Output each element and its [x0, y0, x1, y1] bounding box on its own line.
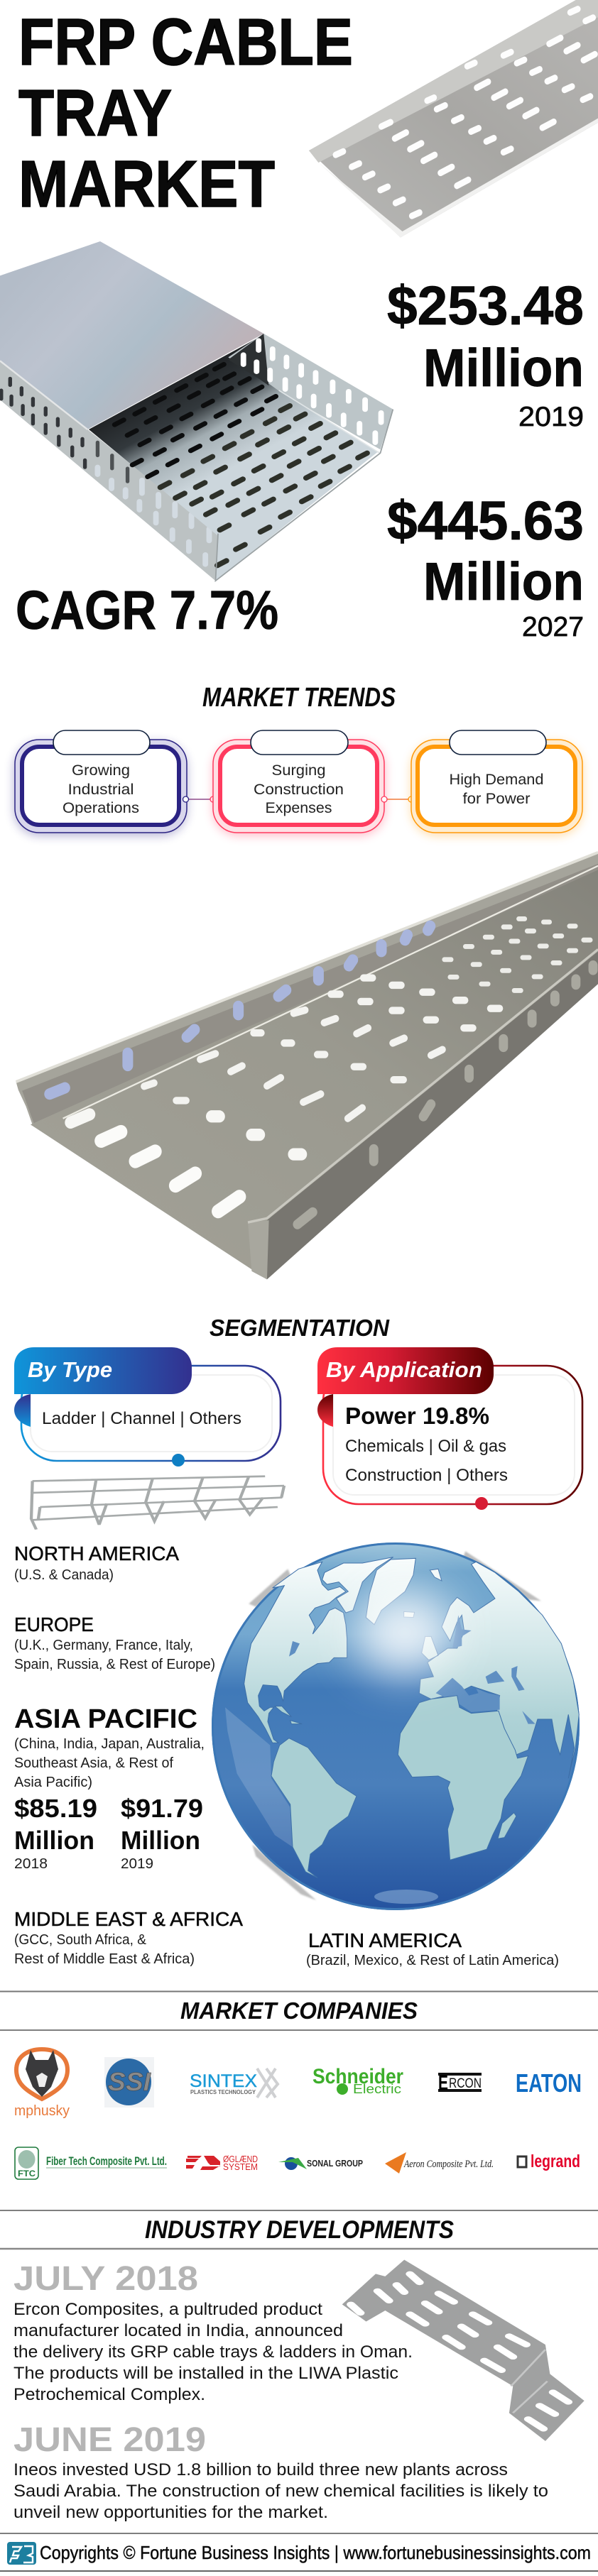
- development: july 2018: Ercon Composites, a pultruded product: [13, 2300, 322, 2319]
- development: july 2018: [13, 2260, 413, 2404]
- heading: segmentation: SEGMENTATION: [210, 1315, 390, 1341]
- logo: Schneider Electric: Schneider: [312, 2065, 403, 2088]
- development: july 2018: manufacturer located in India, announced: [13, 2321, 343, 2340]
- logo: Sonal Group: SONAL GROUP: [307, 2158, 363, 2169]
- CAGR callout: CAGR 7.7%: [16, 580, 278, 641]
- logo: Sintex: SINTEX: [190, 2071, 257, 2091]
- development: june 2019: unveil new opportunities for the market.: [13, 2503, 328, 2522]
- image: perforated tray in perspective: [16, 853, 598, 1279]
- image: metal bracket: [342, 2259, 585, 2441]
- trend cards: [14, 730, 582, 835]
- stat: asia pacific 2018: [14, 1794, 97, 1872]
- region: middle east and africa: (GCC, South Africa, &: [14, 1932, 147, 1948]
- card: high demand for power: for Power: [463, 791, 530, 807]
- stat: asia pacific 2019: 2019: [121, 1856, 153, 1872]
- logo: Legrand: [518, 2152, 580, 2171]
- logo: Fiber Tech Composite: Fiber Tech Composite Pvt. Ltd.: [46, 2154, 167, 2168]
- development: july 2018: JULY 2018: [13, 2260, 198, 2298]
- stat: 2027 market size: $445.63: [387, 490, 584, 552]
- development: july 2018: the delivery its GRP cable trays & ladders in Oman.: [13, 2342, 413, 2362]
- region: north america: (U.S. & Canada): [14, 1567, 114, 1583]
- development: june 2019: Saudi Arabia. The construction of new chemical facilities is likely to: [13, 2482, 548, 2501]
- card: surging construction expenses: Construction: [254, 782, 344, 798]
- region: europe: Spain, Russia, & Rest of Europe): [14, 1657, 215, 1672]
- stat: asia pacific 2019: [121, 1794, 203, 1872]
- region: north america: NORTH AMERICA: [14, 1542, 180, 1564]
- card: high demand for power: [411, 730, 582, 835]
- logo: Aeron Composite: [385, 2152, 494, 2174]
- region: europe: [14, 1613, 215, 1672]
- logo: Fiber Tech Composite: [15, 2147, 167, 2179]
- region: europe: EUROPE: [14, 1613, 94, 1635]
- stat: asia pacific 2019: Million: [121, 1826, 200, 1855]
- panel: by type: [14, 1347, 281, 1467]
- stat: 2019 market size: [387, 275, 584, 432]
- logo: Aeron Composite: Aeron Composite Pvt. Ltd.: [403, 2159, 494, 2170]
- application list: Construction | Others: [345, 1466, 508, 1485]
- type list: Ladder | Channel | Others: [42, 1409, 241, 1428]
- logo: Fiber Tech Composite: FTC: [18, 2169, 36, 2178]
- logo: Schneider Electric: Electric: [353, 2082, 401, 2096]
- region: middle east and africa: [14, 1908, 244, 1967]
- logo: Sintex: PLASTICS TECHNOLOGY: [190, 2089, 256, 2095]
- stat: 2019 market size: 2019: [518, 402, 584, 432]
- stat: 2019 market size: Million: [423, 338, 584, 398]
- application list: Power 19.8%: [345, 1403, 489, 1429]
- region: north america: [14, 1542, 180, 1583]
- logo: Oglaend System: ØGLÆND: [223, 2154, 258, 2164]
- stat: 2027 market size: Million: [423, 552, 584, 611]
- image: flat perforated cable tray: [309, 0, 598, 238]
- header: by application: [317, 1347, 494, 1394]
- header: by application: By Application: [326, 1357, 482, 1382]
- logo: Sonal Group: [278, 2157, 363, 2170]
- stat: 2027 market size: [387, 490, 584, 642]
- development: july 2018: Petrochemical Complex.: [13, 2385, 205, 2404]
- region: latin america: [306, 1929, 559, 1968]
- heading: industry developments: INDUSTRY DEVELOPMENTS: [145, 2216, 454, 2244]
- logo: Oglaend System: [186, 2154, 258, 2172]
- region: asia pacific: Southeast Asia, & Rest of: [14, 1755, 173, 1771]
- image: wire mesh tray: [31, 1476, 284, 1530]
- logo: Schneider Electric: [312, 2065, 403, 2096]
- card: surging construction expenses: Surging: [271, 762, 325, 779]
- development: july 2018: The products will be installed in the LIWA Plastic: [13, 2364, 398, 2383]
- logo: mp husky: [14, 2049, 70, 2119]
- fold: [14, 1394, 31, 1427]
- logo: SSI: [104, 2057, 154, 2108]
- continents: [225, 1557, 579, 1878]
- logo: Oglaend System: SYSTEM: [223, 2161, 258, 2172]
- logo: Ercon: E: [438, 2071, 448, 2095]
- panel: by application: [317, 1347, 582, 1510]
- highlights: [355, 1590, 455, 1675]
- stat: asia pacific 2018: Million: [14, 1826, 94, 1855]
- card: surging construction expenses: Expenses: [266, 800, 332, 816]
- card: growing industrial operations: Industrial: [68, 782, 134, 798]
- image: covered cable tray: [0, 241, 393, 581]
- shadow marks: [249, 1551, 541, 1900]
- stat: 2027 market size: 2027: [522, 612, 584, 642]
- globe: [212, 1542, 580, 1910]
- header: by type: [14, 1347, 192, 1394]
- logo: Ercon: [438, 2071, 482, 2095]
- connector: [183, 796, 216, 802]
- card: growing industrial operations: [14, 730, 187, 835]
- logo: Ercon: RCON: [449, 2076, 482, 2091]
- logo: mp husky: mphusky: [14, 2103, 70, 2119]
- logo: Legrand: legrand: [531, 2152, 580, 2171]
- development: june 2019: [13, 2421, 548, 2522]
- icon: Fortune Business Insights logo: [7, 2542, 36, 2565]
- region: middle east and africa: MIDDLE EAST & AFRICA: [14, 1908, 244, 1930]
- connector: [381, 796, 414, 802]
- application list: [345, 1403, 508, 1485]
- region: middle east and africa: Rest of Middle East & Africa): [14, 1951, 195, 1967]
- card: surging construction expenses: [213, 730, 385, 835]
- region: asia pacific: (China, India, Japan, Australia,: [14, 1736, 205, 1752]
- region: europe: (U.K., Germany, France, Italy,: [14, 1638, 193, 1653]
- title: TRAY: [18, 76, 172, 150]
- heading: market trends: MARKET TRENDS: [202, 683, 396, 713]
- stat: asia pacific 2018: $85.19: [14, 1794, 97, 1823]
- application list: Chemicals | Oil & gas: [345, 1437, 506, 1456]
- region: asia pacific: Asia Pacific): [14, 1775, 92, 1790]
- stat: asia pacific 2019: $91.79: [121, 1794, 203, 1823]
- development: june 2019: JUNE 2019: [13, 2421, 206, 2459]
- stat: 2019 market size: $253.48: [387, 275, 584, 336]
- region: latin america: (Brazil, Mexico, & Rest of Latin America): [306, 1953, 559, 1968]
- card: growing industrial operations: Growing: [72, 762, 130, 779]
- header: by type: By Type: [28, 1357, 112, 1382]
- title: MARKET: [18, 147, 275, 221]
- card: high demand for power: High Demand: [449, 772, 544, 788]
- region: asia pacific: ASIA PACIFIC: [14, 1704, 197, 1734]
- card: growing industrial operations: Operations: [62, 800, 139, 816]
- title: FRP CABLE: [18, 5, 353, 79]
- development: june 2019: Ineos invested USD 1.8 billion to build three new plants across: [13, 2460, 508, 2479]
- logo: SSI: SSI: [108, 2067, 151, 2096]
- fold: [317, 1394, 333, 1427]
- stat: asia pacific 2018: 2018: [14, 1856, 48, 1872]
- title: [18, 5, 353, 221]
- region: asia pacific: [14, 1704, 205, 1872]
- heading: market companies: MARKET COMPANIES: [180, 1997, 418, 2024]
- region: latin america: LATIN AMERICA: [308, 1929, 462, 1951]
- logo: Sintex: [190, 2068, 278, 2098]
